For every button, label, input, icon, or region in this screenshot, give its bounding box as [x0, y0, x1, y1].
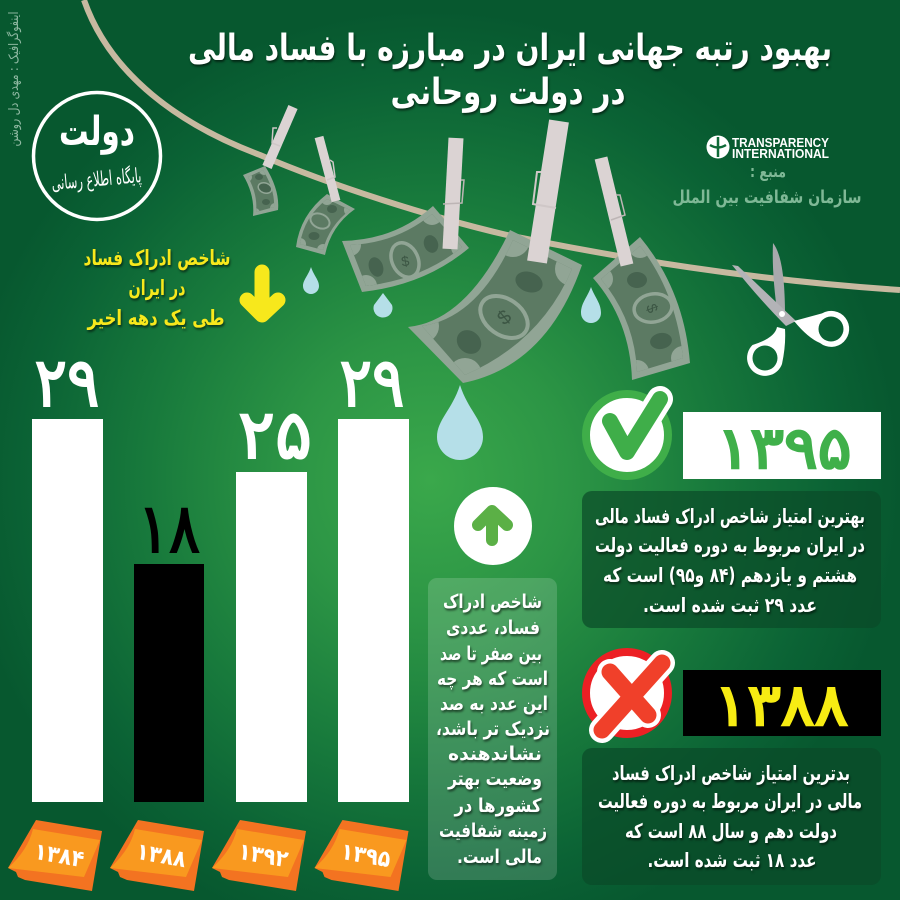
year box 1388 [683, 670, 881, 739]
source text [672, 162, 862, 208]
scissors [732, 243, 849, 376]
panel: index definition: کشورها در [454, 795, 542, 817]
title: در دولت روحانی [390, 72, 626, 113]
money note 5: $ [642, 302, 661, 316]
panel: index definition: مالی است. [457, 846, 542, 868]
panel: index definition: بین صفر تا صد [440, 643, 542, 665]
clothesline rope [84, 0, 900, 290]
bar 1395: ۲۹ [340, 344, 404, 423]
source text: منبع : [750, 162, 786, 181]
bar chart [32, 344, 409, 802]
panel: best score [582, 491, 881, 628]
panel: index definition: نزدیک تر باشد، [436, 718, 550, 740]
sticky note 1388 [110, 820, 204, 891]
panel: index definition: شاخص ادراک [443, 591, 542, 613]
bar 1392 [236, 396, 312, 802]
panel: index definition [428, 578, 557, 880]
panel: best score: عدد ۲۹ ثبت شده است. [643, 593, 817, 617]
left yellow heading: در ایران [128, 276, 186, 300]
panel: index definition: نشاندهنده [448, 743, 542, 765]
panel: index definition: وضعیت بهتر [447, 768, 542, 790]
panel: index definition: فساد، عددی [446, 617, 540, 639]
clothespins [267, 107, 627, 265]
bar 1384: ۲۹ [34, 344, 100, 423]
sticky note 1384: ۱۳۸۴ [32, 839, 86, 873]
money note 4: $ [493, 306, 516, 330]
transparency international logo [706, 136, 830, 161]
sticky note 1392 [212, 820, 306, 891]
bar 1384 [32, 344, 103, 802]
bar 1388: ۱۸ [138, 490, 200, 569]
logo: government information portal: پایگاه اطلاع رسانی [51, 163, 142, 196]
money note 3: $ [400, 252, 411, 270]
panel: index definition: این عدد به صد [440, 693, 548, 715]
sticky note 1392: ۱۳۹۲ [236, 839, 290, 873]
icon: yellow down arrow [247, 272, 278, 315]
money note 3 [342, 206, 469, 292]
water drops [303, 267, 601, 460]
sticky note 1388: ۱۳۸۸ [134, 839, 188, 873]
left yellow heading: شاخص ادراک فساد [84, 246, 230, 270]
bar 1395 [338, 344, 409, 802]
icon: green up arrow in circle [454, 487, 532, 565]
logo: government information portal [34, 92, 160, 220]
panel: index definition: زمینه شفافیت [439, 820, 547, 842]
bar 1392: ۲۵ [238, 396, 312, 475]
sticky note 1384 [8, 820, 102, 891]
panel: index definition: است که هر چه [437, 668, 548, 690]
left yellow heading [84, 246, 230, 330]
money note 1 [243, 166, 278, 216]
sticky note 1395 [314, 820, 408, 891]
bar 1388 [134, 490, 204, 802]
money note 5 [593, 237, 690, 380]
panel: best score: هشتم و یازدهم (۸۴ و۹۵) است که [603, 563, 857, 587]
money note 4 [408, 230, 582, 383]
icon: check mark [586, 394, 668, 476]
icon: red cross [586, 652, 668, 734]
money note 2 [294, 193, 356, 256]
logo: government information portal: دولت [59, 109, 135, 155]
sticky note 1395: ۱۳۹۵ [339, 839, 393, 873]
panel: worst score: دولت دهم و سال ۸۸ است که [625, 819, 837, 843]
transparency international logo: TRANSPARENCY [732, 136, 830, 150]
left yellow heading: طی یک دهه اخیر [87, 306, 224, 330]
transparency international logo: INTERNATIONAL [732, 147, 829, 161]
year box 1388: ۱۳۸۸ [714, 671, 848, 739]
year box 1395 [683, 412, 881, 482]
year box 1395: ۱۳۹۵ [716, 414, 852, 482]
panel: worst score [582, 748, 881, 885]
title [188, 28, 832, 113]
panel: worst score: عدد ۱۸ ثبت شده است. [648, 848, 816, 872]
